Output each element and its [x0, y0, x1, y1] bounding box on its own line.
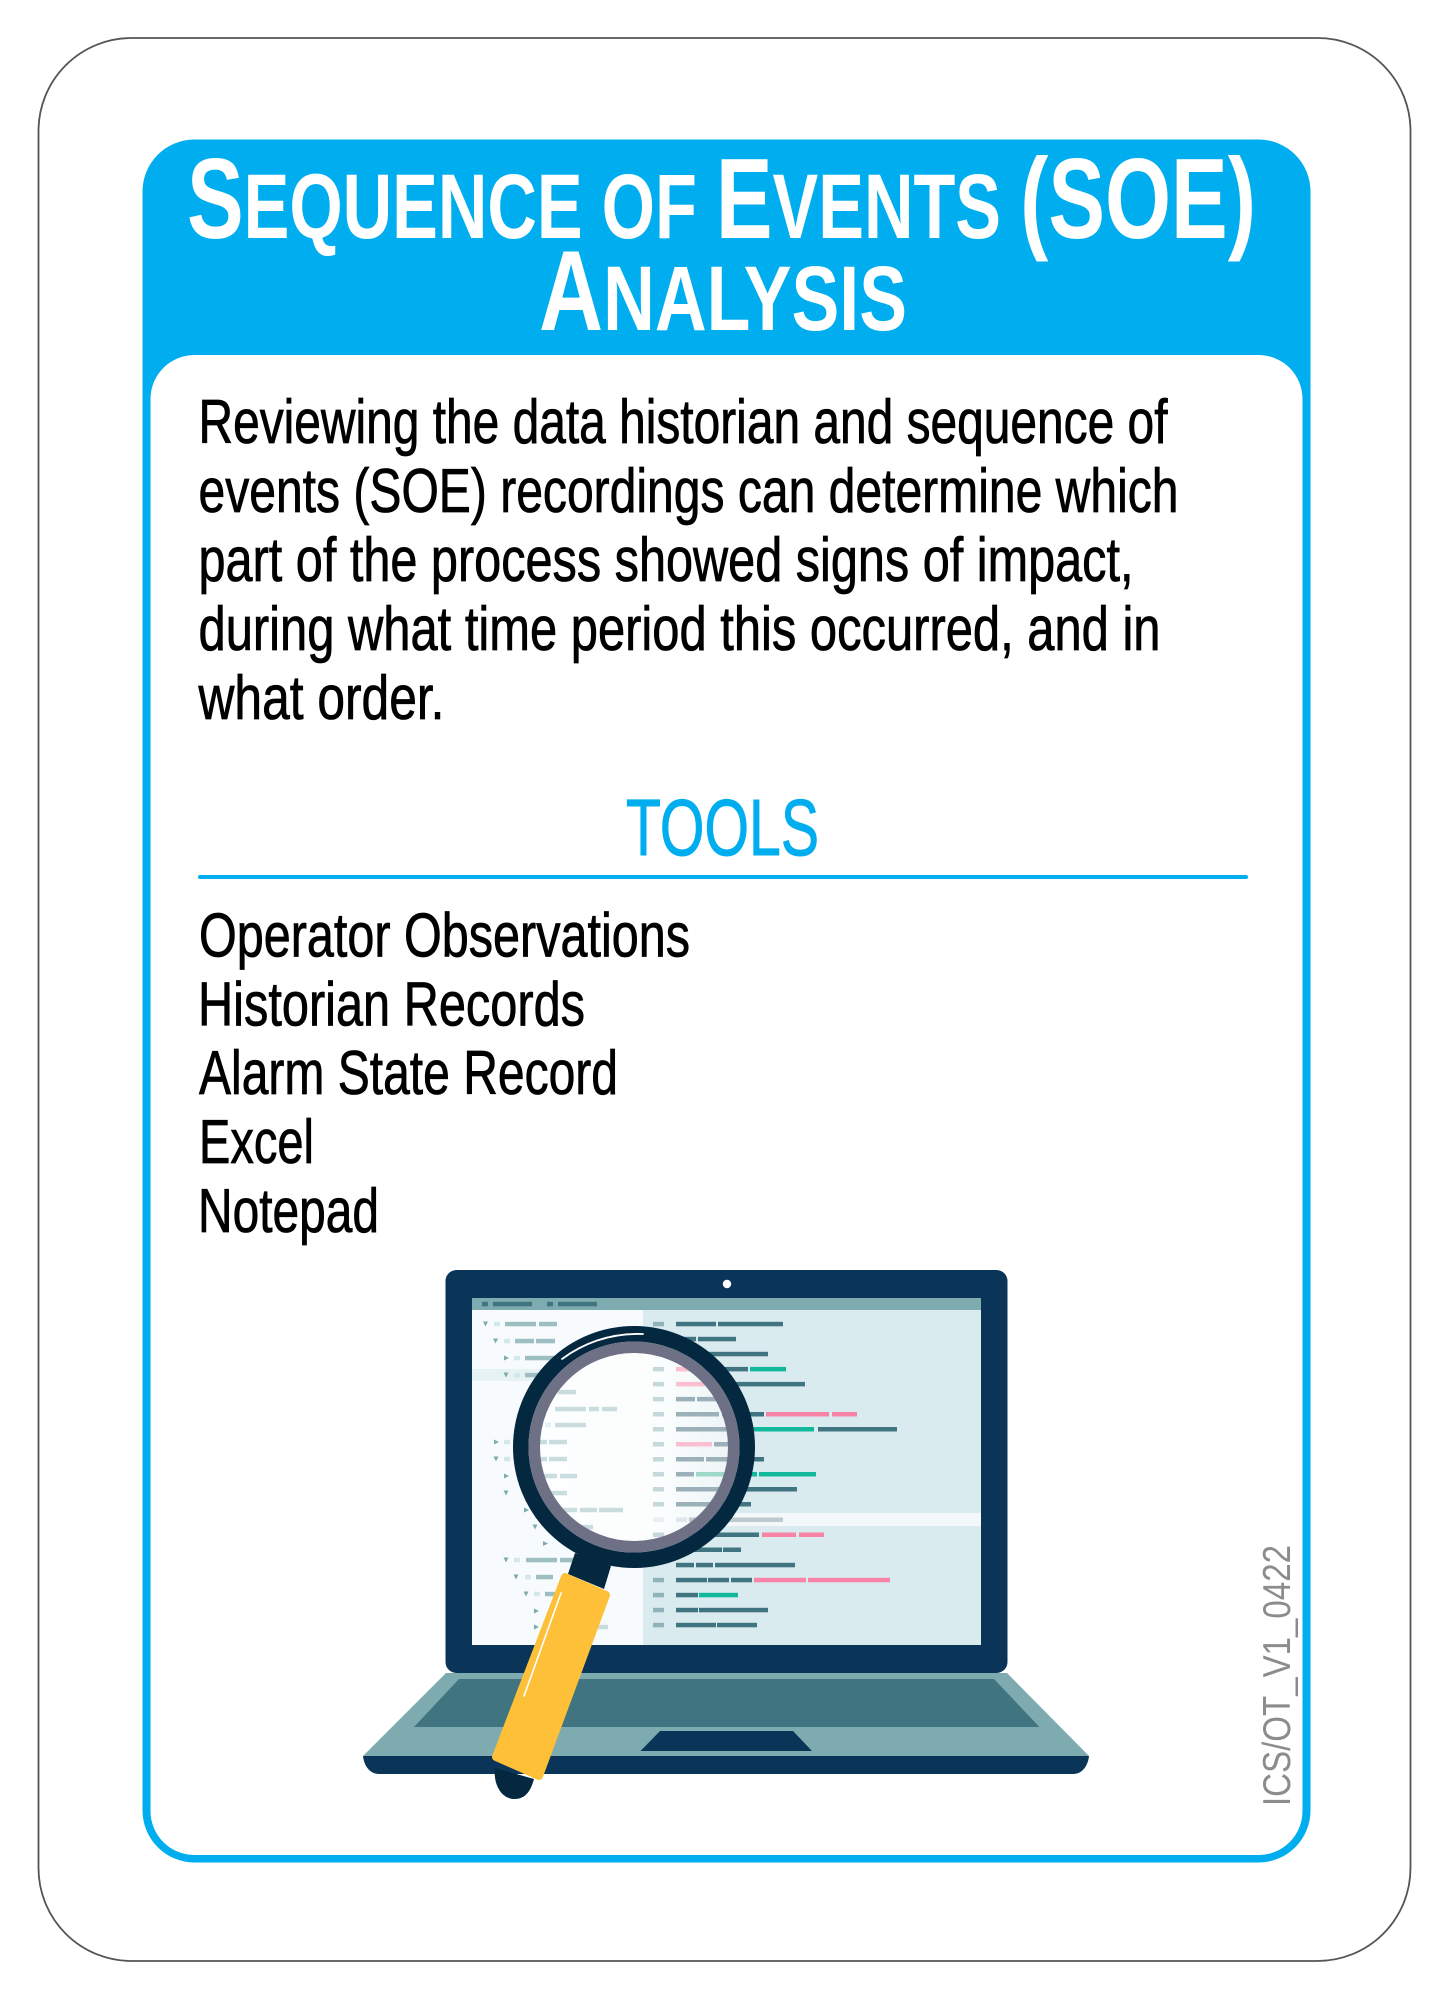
- tools list: Excel: [199, 1108, 314, 1177]
- description text: [198, 388, 1178, 733]
- description text: Reviewing the data historian and sequence of: [198, 388, 1168, 457]
- magnifier handle end: [495, 1768, 534, 1799]
- tools list: [198, 902, 690, 1246]
- screen: code editor: [472, 1298, 981, 1645]
- tools list: Operator Observations: [199, 902, 690, 970]
- magnifier neck: [568, 1553, 611, 1589]
- title: SEQUENCE OF EVENTS (SOE): [187, 136, 1256, 263]
- description text: during what time period this occurred, and in: [198, 595, 1160, 664]
- title: [187, 136, 1256, 355]
- magnifier lens view: [538, 1351, 730, 1543]
- description text: part of the process showed signs of impact,: [198, 526, 1134, 595]
- description text: what order.: [198, 664, 444, 733]
- icon: laptop with magnifier: [363, 1270, 1089, 1799]
- magnifying glass: [495, 1334, 747, 1799]
- description text: events (SOE) recordings can determine which: [198, 457, 1178, 526]
- laptop screen bezel: [446, 1270, 1008, 1673]
- webcam: [723, 1280, 731, 1288]
- title: ANALYSIS: [539, 228, 907, 355]
- tools list: Alarm State Record: [199, 1039, 618, 1108]
- code lines: [653, 1322, 897, 1627]
- tools divider: [198, 875, 1248, 879]
- tools heading: TOOLS: [626, 783, 819, 872]
- magnifier handle: [496, 1577, 606, 1776]
- laptop base: [363, 1673, 1089, 1774]
- version label: ICS/OT_V1_0422: [1256, 1545, 1299, 1806]
- file tree: [483, 1322, 623, 1630]
- tools list: Historian Records: [198, 970, 585, 1040]
- magnifier rim: [521, 1334, 747, 1560]
- panel: blue card frame: [142, 140, 1310, 1862]
- tools list: Notepad: [198, 1177, 379, 1246]
